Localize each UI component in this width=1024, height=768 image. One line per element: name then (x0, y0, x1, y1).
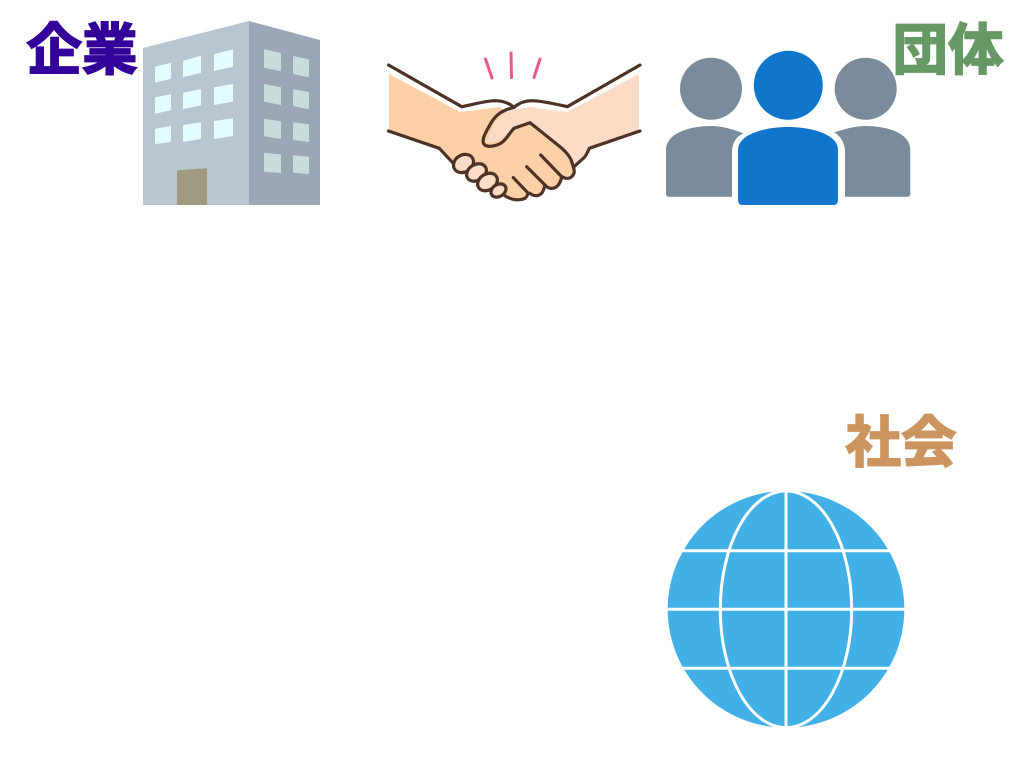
heading: 団体: 団体 (892, 20, 1004, 82)
icon: office building (143, 21, 320, 205)
icon: group of people (666, 51, 910, 205)
heading: 社会: 社会 (846, 412, 957, 474)
heading: 企業: 企業 (26, 20, 138, 82)
icon: globe (660, 490, 912, 729)
icon: handshake (388, 53, 640, 200)
